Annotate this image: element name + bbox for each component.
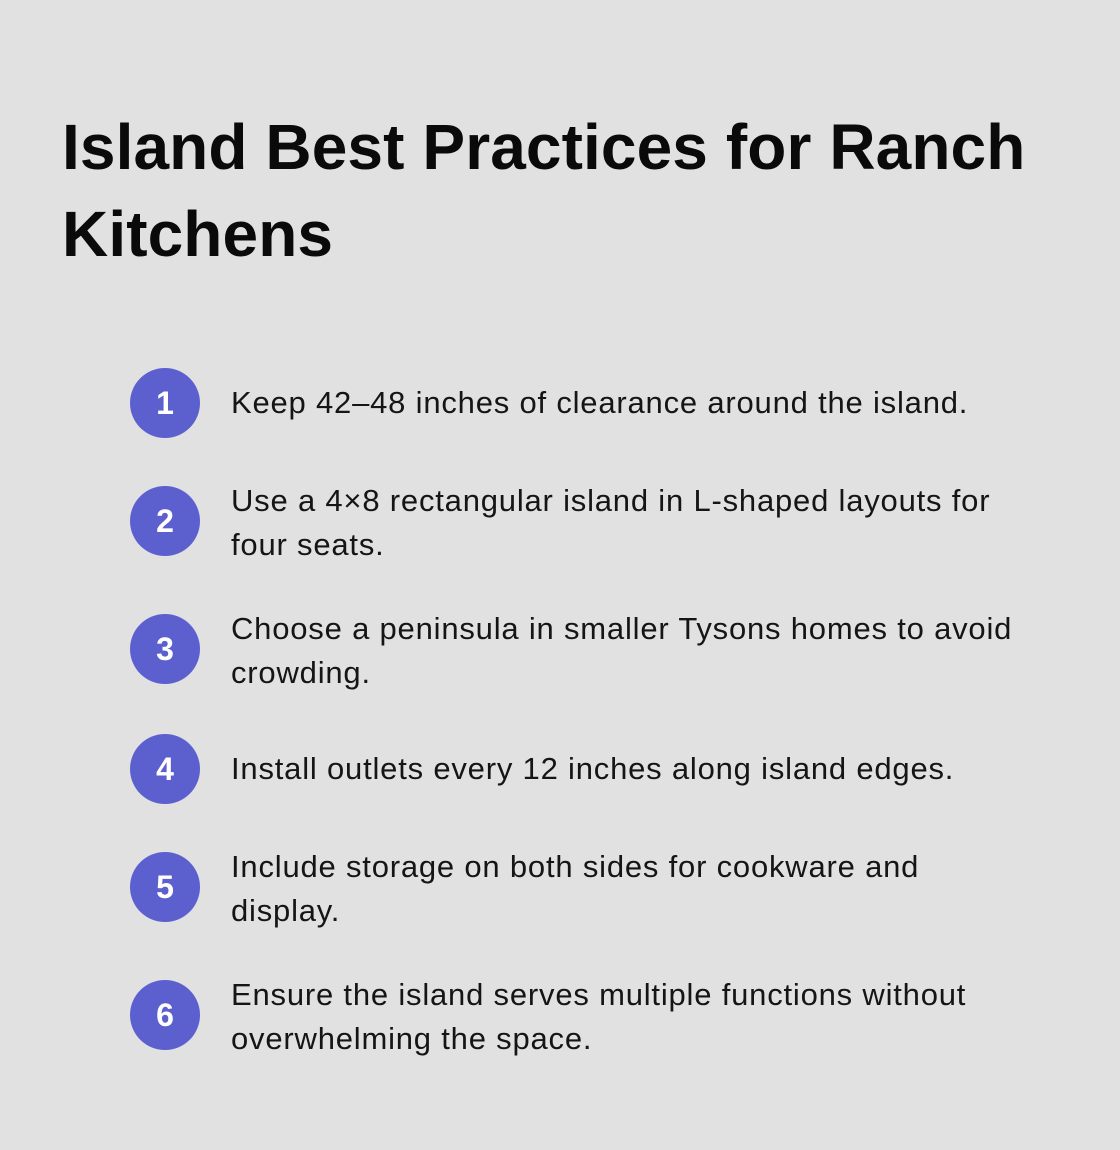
item 5: [130, 849, 919, 928]
text 5: display.: [231, 893, 340, 928]
text 3: crowding.: [231, 655, 371, 690]
badge 1: [130, 368, 200, 438]
badge 4: 4: [156, 751, 174, 787]
badge 2: [130, 486, 200, 556]
text 2: [231, 483, 990, 562]
text 5: [231, 849, 919, 928]
badge 5: 5: [156, 869, 174, 905]
item 2: [130, 483, 990, 562]
text 1: Keep 42–48 inches of clearance around the island.: [231, 385, 968, 420]
badge 2: 2: [156, 503, 174, 539]
title: Island Best Practices for Ranch: [62, 111, 1025, 183]
title: Kitchens: [62, 198, 333, 270]
badge 3: 3: [156, 631, 174, 667]
badge 3: [130, 614, 200, 684]
text 5: Include storage on both sides for cookware and: [231, 849, 919, 884]
title: [62, 111, 1025, 270]
text 3: Choose a peninsula in smaller Tysons homes to avoid: [231, 611, 1012, 646]
text 4: Install outlets every 12 inches along island edges.: [231, 751, 954, 786]
text 3: [231, 611, 1012, 690]
item 3: [130, 611, 1012, 690]
item 6: [130, 977, 966, 1056]
item 4: [130, 734, 954, 804]
badge 6: 6: [156, 997, 174, 1033]
badge 1: 1: [156, 385, 174, 421]
text 6: [231, 977, 966, 1056]
text 6: overwhelming the space.: [231, 1021, 592, 1056]
text 6: Ensure the island serves multiple functions without: [231, 977, 966, 1012]
text 2: Use a 4×8 rectangular island in L-shaped layouts for: [231, 483, 990, 518]
text 2: four seats.: [231, 527, 385, 562]
badge 5: [130, 852, 200, 922]
badge 6: [130, 980, 200, 1050]
item 1: [130, 368, 968, 438]
badge 4: [130, 734, 200, 804]
